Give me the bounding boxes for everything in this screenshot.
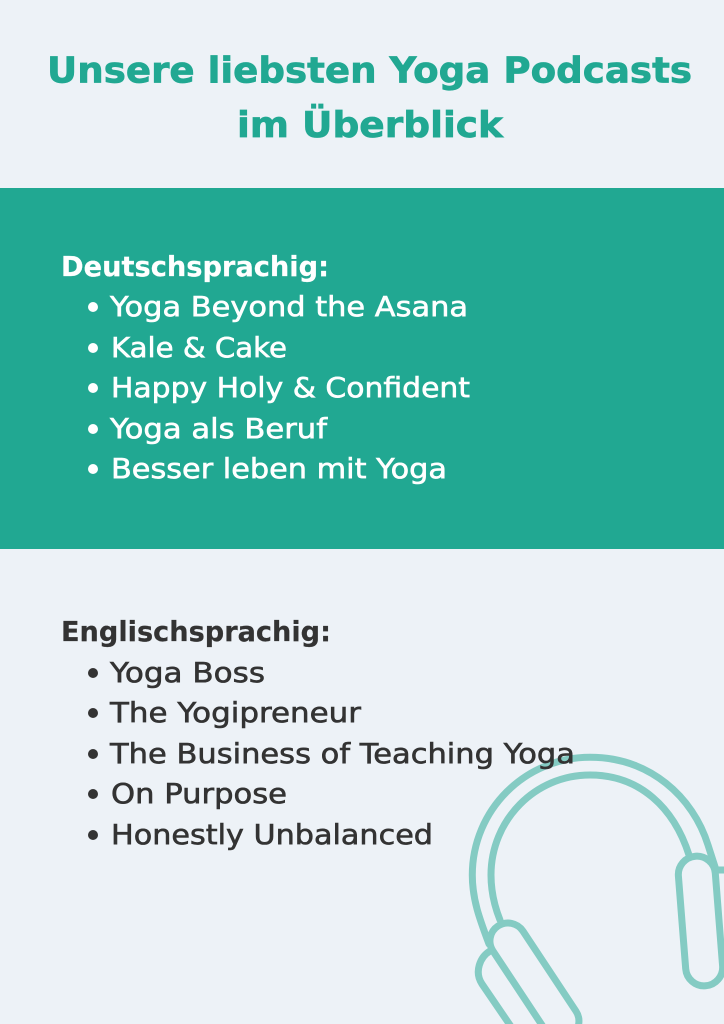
list: German podcasts: Besser leben mit Yoga bbox=[111, 452, 447, 485]
list: English podcasts: Yoga Boss bbox=[109, 656, 265, 689]
heading: Englischsprachig: Englischsprachig: bbox=[61, 616, 331, 648]
title: im Überblick bbox=[237, 104, 504, 146]
list: German podcasts: Yoga Beyond the Asana bbox=[109, 290, 468, 323]
list: English podcasts bbox=[88, 656, 575, 851]
list: English podcasts: The Yogipreneur bbox=[109, 696, 362, 729]
title: Unsere liebsten Yoga Podcasts bbox=[47, 50, 692, 92]
title bbox=[47, 50, 692, 146]
list: German podcasts bbox=[88, 290, 470, 485]
icon: headphones bbox=[472, 757, 724, 1024]
list: German podcasts: Kale & Cake bbox=[111, 331, 287, 364]
panel: Deutschsprachig bbox=[0, 188, 724, 549]
list: German podcasts: Happy Holy & Confident bbox=[111, 371, 470, 404]
heading: Deutschsprachig: Deutschsprachig: bbox=[61, 251, 329, 283]
list: German podcasts: Yoga als Beruf bbox=[109, 412, 328, 445]
panel: Englischsprachig bbox=[61, 616, 575, 851]
list: English podcasts: The Business of Teaching Yoga bbox=[109, 737, 575, 770]
list: English podcasts: On Purpose bbox=[111, 777, 287, 810]
list: English podcasts: Honestly Unbalanced bbox=[111, 818, 433, 851]
